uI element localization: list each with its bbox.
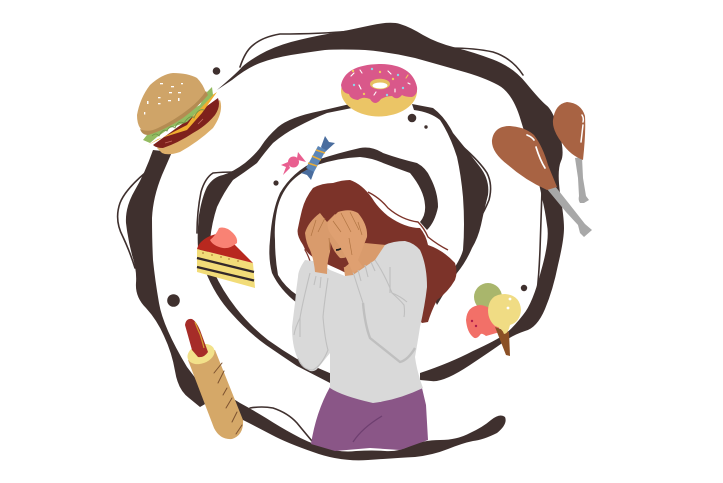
woman: stray curl <box>300 238 310 261</box>
small drumstick highlight <box>581 115 583 142</box>
burger top bun shadow <box>140 91 208 135</box>
burger top bun <box>137 73 206 133</box>
burger patty <box>153 98 219 148</box>
pink scoop <box>466 305 500 338</box>
woman: pants crease <box>353 416 382 442</box>
yellow scoop <box>488 294 521 334</box>
woman: sweater folds <box>294 260 415 370</box>
donut sprinkles <box>351 70 410 95</box>
spiral: droplets <box>167 67 527 307</box>
woman: under-chin hair <box>326 245 354 268</box>
spiral band: outer top and right <box>217 23 564 381</box>
spiral band: bottom tail <box>232 398 506 460</box>
small drumstick meat <box>553 102 585 160</box>
donut hole centre <box>372 82 388 88</box>
food: burger <box>137 73 221 154</box>
yellow scoop highlights <box>507 298 511 309</box>
donut base <box>341 66 417 116</box>
woman: neck and chest <box>343 243 386 276</box>
cake cream <box>210 228 237 248</box>
pink candy <box>281 152 306 175</box>
spiral: dark chocolate swirl <box>118 23 564 460</box>
woman: finger lines <box>311 212 362 255</box>
woman: sweater <box>292 241 427 403</box>
woman: hair <box>298 180 456 323</box>
blue candy body <box>306 146 326 172</box>
burger cheese <box>148 92 217 145</box>
burger bottom bun <box>157 100 221 154</box>
pink scoop dots <box>471 320 477 327</box>
food: donut <box>341 64 417 116</box>
food: chicken drumsticks <box>492 102 592 237</box>
woman: closed eye crease <box>337 222 345 226</box>
donut hole <box>370 79 390 89</box>
food: cake slice <box>197 228 255 288</box>
spiral band: inner ring <box>269 148 438 303</box>
food: ice cream cone <box>466 283 521 356</box>
food: wrapped candies <box>281 136 335 180</box>
burger lettuce <box>143 87 213 143</box>
spiral band: second ring lower left <box>205 270 332 384</box>
hot dog mustard <box>195 322 204 348</box>
blue candy stripes <box>308 150 325 166</box>
woman: hair strand <box>368 192 448 250</box>
cake sponge <box>197 249 255 288</box>
spiral: thin strands <box>118 31 542 447</box>
large drumstick meat <box>492 126 557 190</box>
cake filling stripes <box>197 258 254 280</box>
cone <box>495 327 510 356</box>
spiral band: second ring right <box>412 104 488 305</box>
woman <box>292 180 456 451</box>
woman: pants <box>311 387 428 451</box>
cake icing <box>197 232 253 263</box>
hot dog sausage <box>185 319 208 357</box>
large drumstick bone <box>547 186 592 237</box>
hot dog bun cuts <box>214 363 242 434</box>
woman: mouth <box>336 246 343 250</box>
woman: right hand <box>328 210 367 273</box>
large drumstick highlight <box>527 135 545 168</box>
hot dog bun <box>188 350 243 439</box>
food: hot dog <box>185 319 243 439</box>
spiral band: outer left <box>126 150 212 407</box>
cake sponge dots <box>202 252 239 262</box>
green scoop <box>474 283 502 311</box>
donut icing <box>341 64 417 103</box>
small drumstick bone <box>575 157 589 203</box>
woman: face <box>330 226 354 258</box>
burger lettuce squiggle <box>152 110 204 136</box>
blue candy wrapper ends <box>301 136 335 180</box>
burger patty highlights <box>165 119 203 143</box>
spiral band: second ring left <box>198 104 352 258</box>
woman: left hand <box>305 213 340 274</box>
hot dog bun opening <box>185 340 217 368</box>
burger sesame seeds <box>144 83 183 114</box>
